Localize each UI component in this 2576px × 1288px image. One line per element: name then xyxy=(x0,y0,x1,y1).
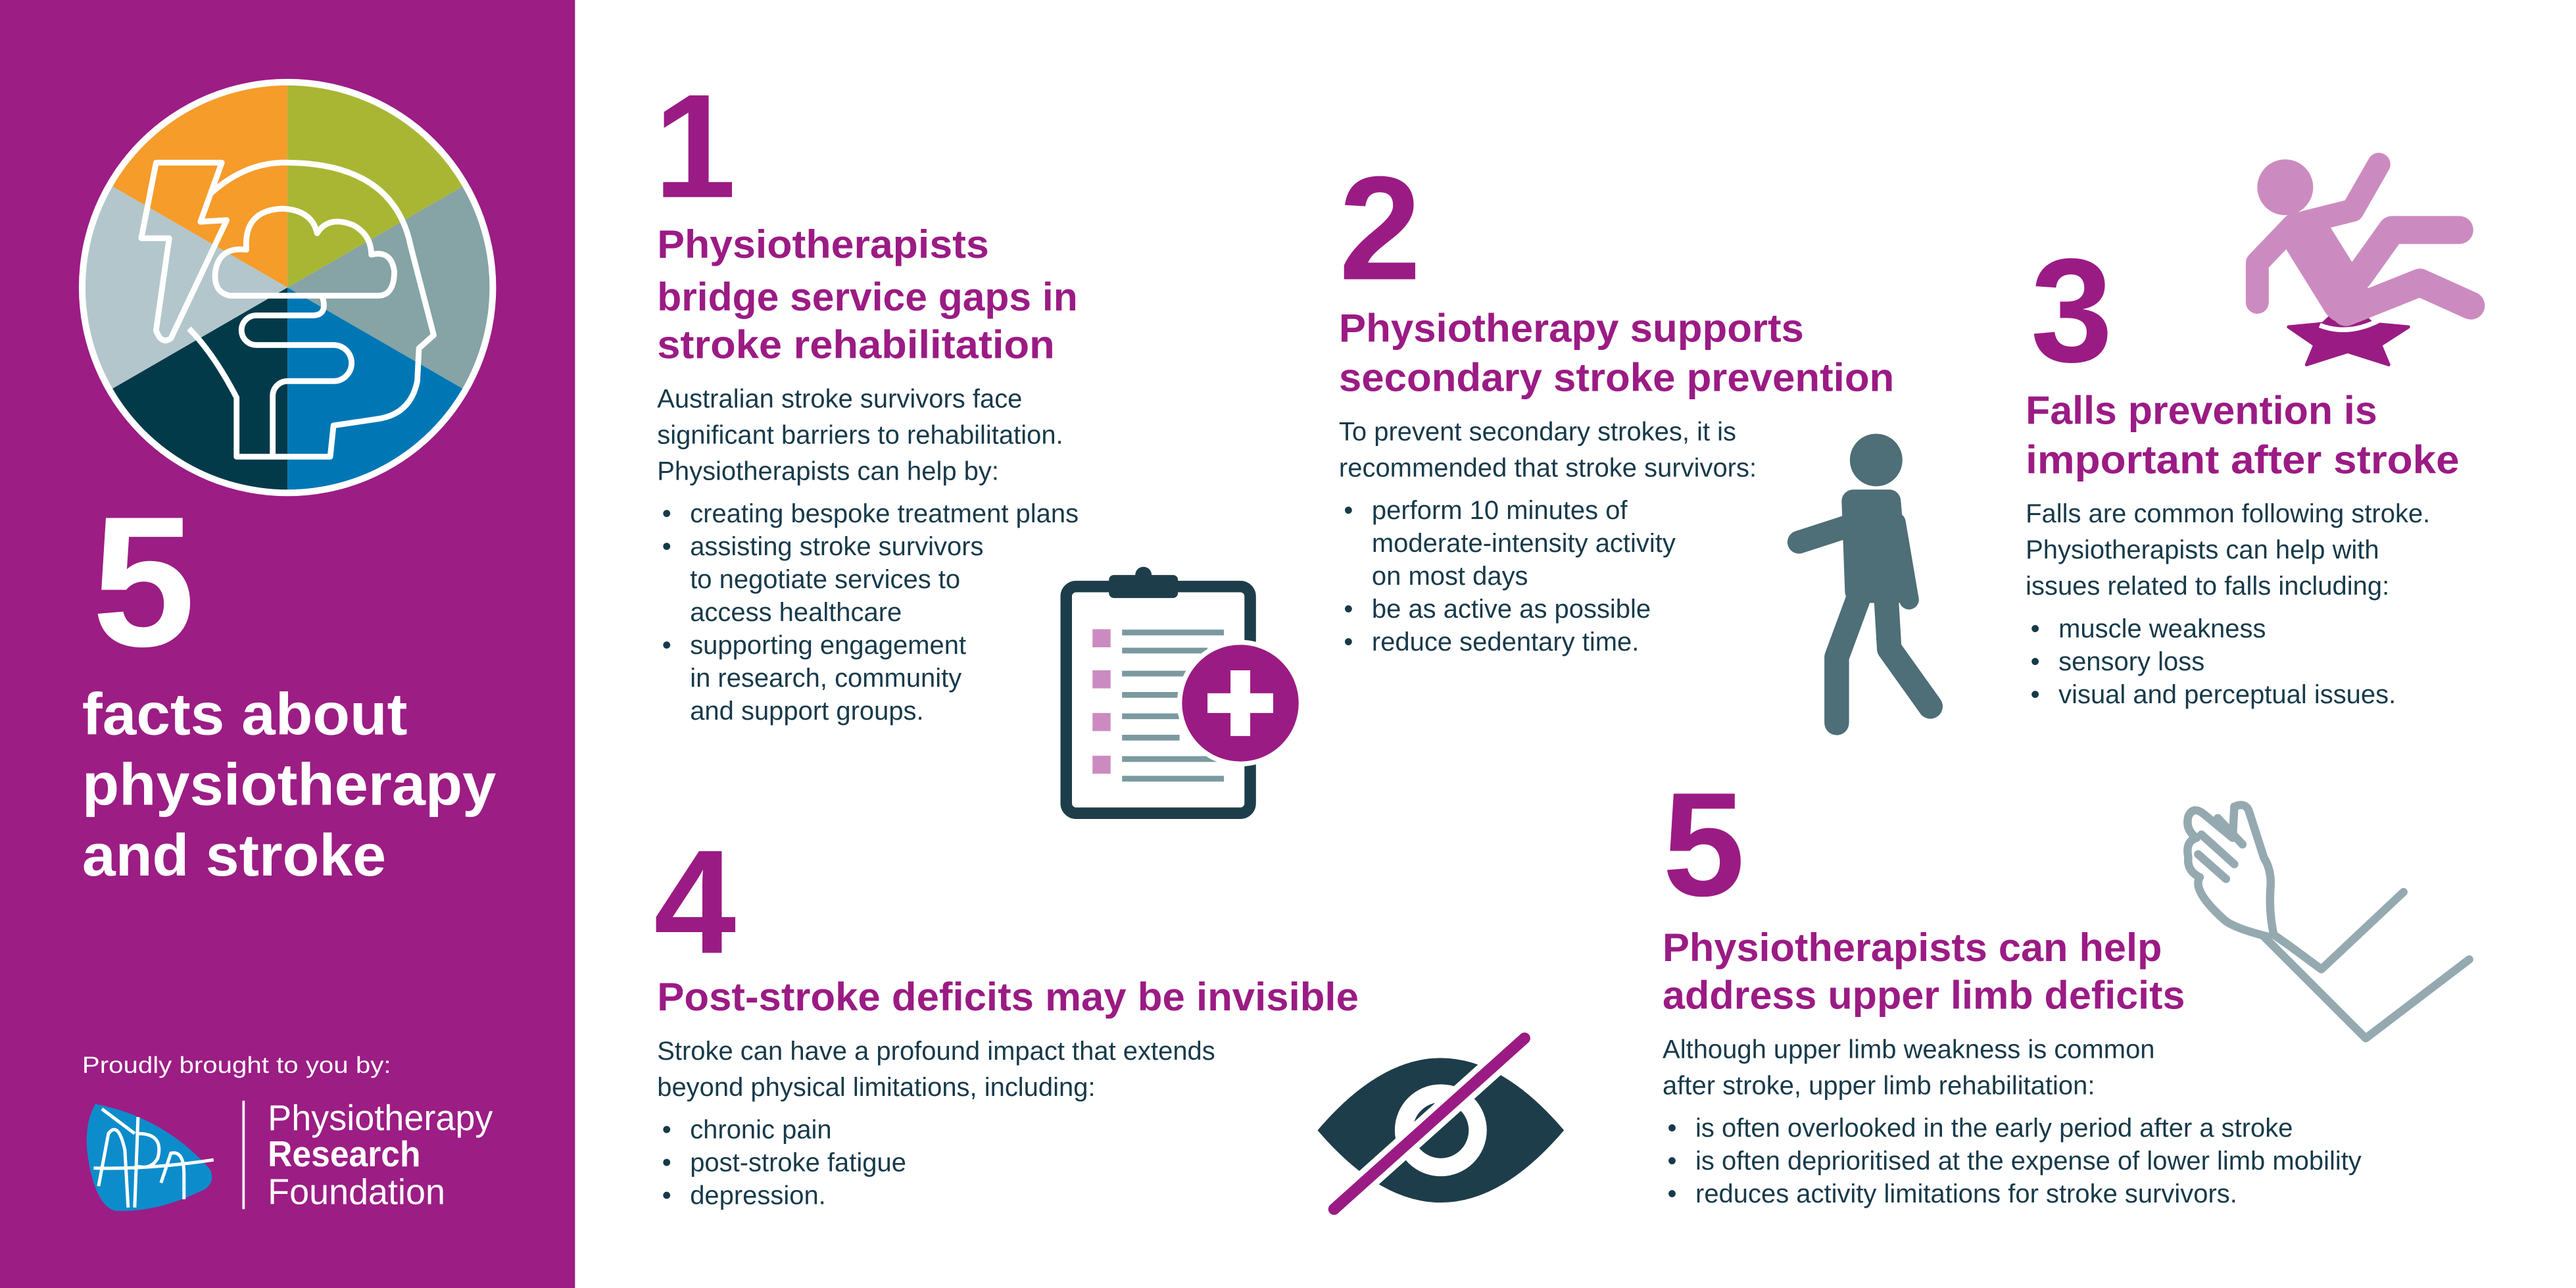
body 5 xyxy=(1663,1035,2362,1208)
body 2: perform 10 minutes of xyxy=(1372,496,1628,525)
logo text: Foundation xyxy=(268,1172,445,1212)
body 2: recommended that stroke survivors: xyxy=(1339,453,1757,482)
body 4: chronic pain xyxy=(690,1116,832,1145)
sidebar panel xyxy=(0,0,575,1288)
body 2: To prevent secondary strokes, it is xyxy=(1339,417,1736,446)
icon: crossed eye xyxy=(1317,1038,1564,1209)
heading 3: Falls prevention is xyxy=(2026,388,2377,432)
body 2: • xyxy=(1344,628,1353,656)
heading 3: important after stroke xyxy=(2026,437,2460,482)
logo text: Research xyxy=(268,1133,421,1174)
body 1: • xyxy=(662,532,671,561)
body 3: muscle weakness xyxy=(2058,614,2266,643)
body 2: moderate-intensity activity xyxy=(1372,529,1676,558)
body 2: • xyxy=(1344,595,1353,624)
heading 1: Physiotherapists xyxy=(657,222,989,266)
body 4: • xyxy=(662,1116,671,1145)
logo divider xyxy=(242,1101,245,1209)
body 4: • xyxy=(662,1181,671,1210)
number 5: 5 xyxy=(1663,762,1745,927)
body 4: Stroke can have a profound impact that extends xyxy=(657,1037,1215,1066)
body 5: • xyxy=(1668,1147,1677,1176)
body 5: is often deprioritised at the expense of lower limb mobility xyxy=(1695,1147,2362,1176)
icon: falling person xyxy=(2257,159,2471,364)
body 2: • xyxy=(1344,496,1353,525)
body 3 xyxy=(2026,499,2430,709)
body 1: • xyxy=(662,631,671,660)
sidebar title: facts about xyxy=(82,681,408,747)
heading 5 xyxy=(1663,926,2185,1017)
body 5: Although upper limb weakness is common xyxy=(1663,1035,2155,1064)
body 1: to negotiate services to xyxy=(690,565,960,594)
body 2: on most days xyxy=(1372,562,1528,591)
body 3: visual and perceptual issues. xyxy=(2058,680,2396,709)
body 4: post-stroke fatigue xyxy=(690,1149,906,1177)
body 1: assisting stroke survivors xyxy=(690,532,984,561)
sidebar big number 5: 5 xyxy=(92,478,195,685)
sidebar title: and stroke xyxy=(82,823,386,889)
body 4: depression. xyxy=(690,1181,826,1210)
body 1 xyxy=(657,384,1079,726)
panel: fact 1 xyxy=(654,64,1301,813)
heading 3 xyxy=(2026,388,2460,482)
panel: fact 2 xyxy=(1339,146,1930,723)
heading 1: bridge service gaps in xyxy=(657,275,1078,319)
body 3: • xyxy=(2031,680,2040,709)
body 1: creating bespoke treatment plans xyxy=(690,499,1079,528)
body 3: sensory loss xyxy=(2058,647,2204,676)
heading 2: Physiotherapy supports xyxy=(1339,306,1804,350)
sponsor text: Proudly brought to you by: xyxy=(82,1053,391,1078)
body 4: beyond physical limitations, including: xyxy=(657,1073,1096,1102)
logo text: Physiotherapy xyxy=(268,1097,493,1138)
body 2: be as active as possible xyxy=(1372,595,1651,624)
body 1: in research, community xyxy=(690,664,961,693)
logo: APA xyxy=(87,1104,214,1211)
body 1: and support groups. xyxy=(690,697,924,726)
heading 2: secondary stroke prevention xyxy=(1339,355,1894,399)
panel: fact 4 xyxy=(654,820,1564,1210)
sidebar title xyxy=(82,681,496,889)
icon: head circle xyxy=(79,79,496,496)
body 5: • xyxy=(1668,1114,1677,1143)
body 2 xyxy=(1339,417,1757,656)
number 3: 3 xyxy=(2031,228,2113,393)
body 2: reduce sedentary time. xyxy=(1372,628,1639,656)
body 4: • xyxy=(662,1149,671,1177)
number 2: 2 xyxy=(1339,146,1421,311)
icon: clipboard xyxy=(1066,567,1301,813)
logo text xyxy=(268,1097,493,1212)
body 1: significant barriers to rehabilitation. xyxy=(657,420,1063,449)
body 5: after stroke, upper limb rehabilitation: xyxy=(1663,1071,2095,1100)
body 5: reduces activity limitations for stroke survivors. xyxy=(1695,1179,2237,1208)
body 3: Falls are common following stroke. xyxy=(2026,499,2430,528)
heading 2 xyxy=(1339,306,1894,399)
number 4: 4 xyxy=(654,820,736,985)
panel: fact 5 xyxy=(1663,762,2469,1208)
icon: arm xyxy=(2187,805,2469,1038)
heading 1 xyxy=(657,222,1078,366)
panel: fact 3 xyxy=(2026,159,2471,709)
body 1: access healthcare xyxy=(690,598,902,627)
body 3: issues related to falls including: xyxy=(2026,572,2389,601)
body 3: • xyxy=(2031,647,2040,676)
body 1: supporting engagement xyxy=(690,631,966,660)
body 3: Physiotherapists can help with xyxy=(2026,535,2379,564)
heading 1: stroke rehabilitation xyxy=(657,322,1055,366)
icon: walking person xyxy=(1799,433,1930,723)
body 5: • xyxy=(1668,1179,1677,1208)
body 1: • xyxy=(662,499,671,528)
heading 5: address upper limb deficits xyxy=(1663,973,2185,1017)
number 1: 1 xyxy=(654,64,736,229)
body 1: Physiotherapists can help by: xyxy=(657,457,999,485)
body 1: Australian stroke survivors face xyxy=(657,384,1022,413)
body 5: is often overlooked in the early period after a stroke xyxy=(1695,1114,2293,1143)
body 3: • xyxy=(2031,614,2040,643)
body 4 xyxy=(657,1037,1215,1210)
heading 4: Post-stroke deficits may be invisible xyxy=(657,975,1359,1019)
sidebar title: physiotherapy xyxy=(82,753,496,818)
heading 5: Physiotherapists can help xyxy=(1663,926,2162,970)
